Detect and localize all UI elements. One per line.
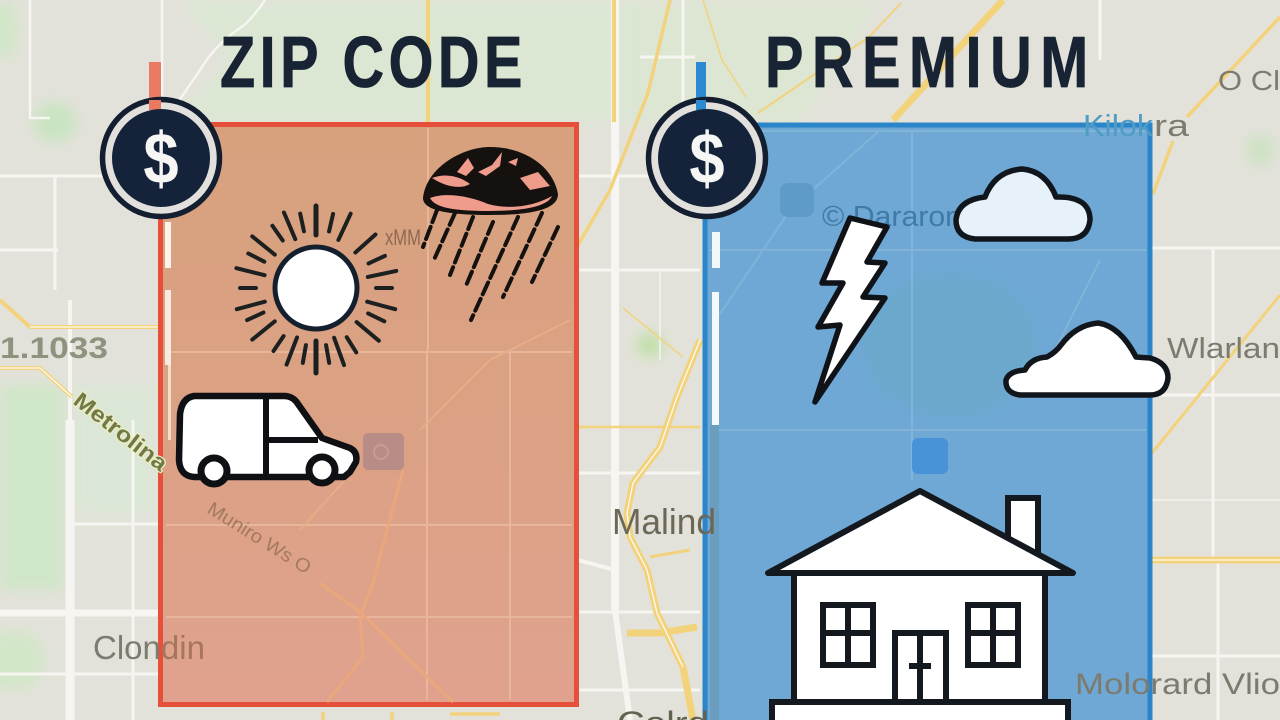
- faint location label: © Dararon: [822, 201, 962, 233]
- panel: premium: [705, 125, 1150, 720]
- faint shield icon: [780, 183, 814, 217]
- icon: dollar badge blue: $: [689, 119, 725, 199]
- map labels: O Cl: [1218, 65, 1280, 96]
- icon: cloud lower: [1006, 323, 1168, 395]
- faint map pin: [363, 433, 404, 470]
- title: zip code: ZIP CODE: [220, 22, 522, 102]
- cloud highlights: [430, 152, 552, 211]
- map labels: 1.1033: [0, 332, 108, 365]
- title: premium: PREMIUM: [765, 22, 1088, 102]
- icon: sun: [236, 206, 396, 373]
- map labels: Molorard Vlio: [1075, 668, 1280, 701]
- roof: [768, 491, 1073, 573]
- icon: dollar badge red: $: [143, 119, 179, 199]
- icon: cloud upper: [956, 169, 1090, 239]
- faint green map area: [865, 275, 1035, 415]
- map labels: Kilok: [1083, 108, 1154, 143]
- faint road label: Muniro Ws O: [203, 498, 315, 579]
- map labels: Metrolina: [69, 387, 173, 476]
- rain streaks: [423, 210, 558, 320]
- base: [772, 702, 1068, 720]
- icon: lightning bolt: [815, 218, 887, 402]
- icon: dollar badge blue: [648, 100, 766, 216]
- map labels: Wlarlan: [1167, 333, 1280, 365]
- chimney: [1008, 498, 1038, 558]
- faint scribble label near sun: xMM: [385, 225, 421, 250]
- faded strip along left edge: [710, 425, 719, 720]
- faint blue map pin: [912, 438, 948, 474]
- map labels: Clondin: [93, 629, 205, 666]
- map labels: ra: [1154, 108, 1190, 143]
- walls: [794, 573, 1045, 703]
- panel: zip code: [160, 124, 576, 704]
- right window: [968, 605, 1018, 665]
- door: [895, 633, 946, 702]
- left window: [823, 605, 873, 665]
- icon: van: [179, 396, 356, 484]
- icon: dollar badge red: [102, 100, 220, 216]
- map labels: Malind: [612, 501, 716, 542]
- left edge accent dashes: [149, 62, 720, 440]
- icon: house: [768, 491, 1073, 720]
- icon: rain cloud: [423, 147, 558, 320]
- faint map roads inside zip code panel: [166, 128, 572, 702]
- faint map roads inside premium panel: [710, 130, 1146, 480]
